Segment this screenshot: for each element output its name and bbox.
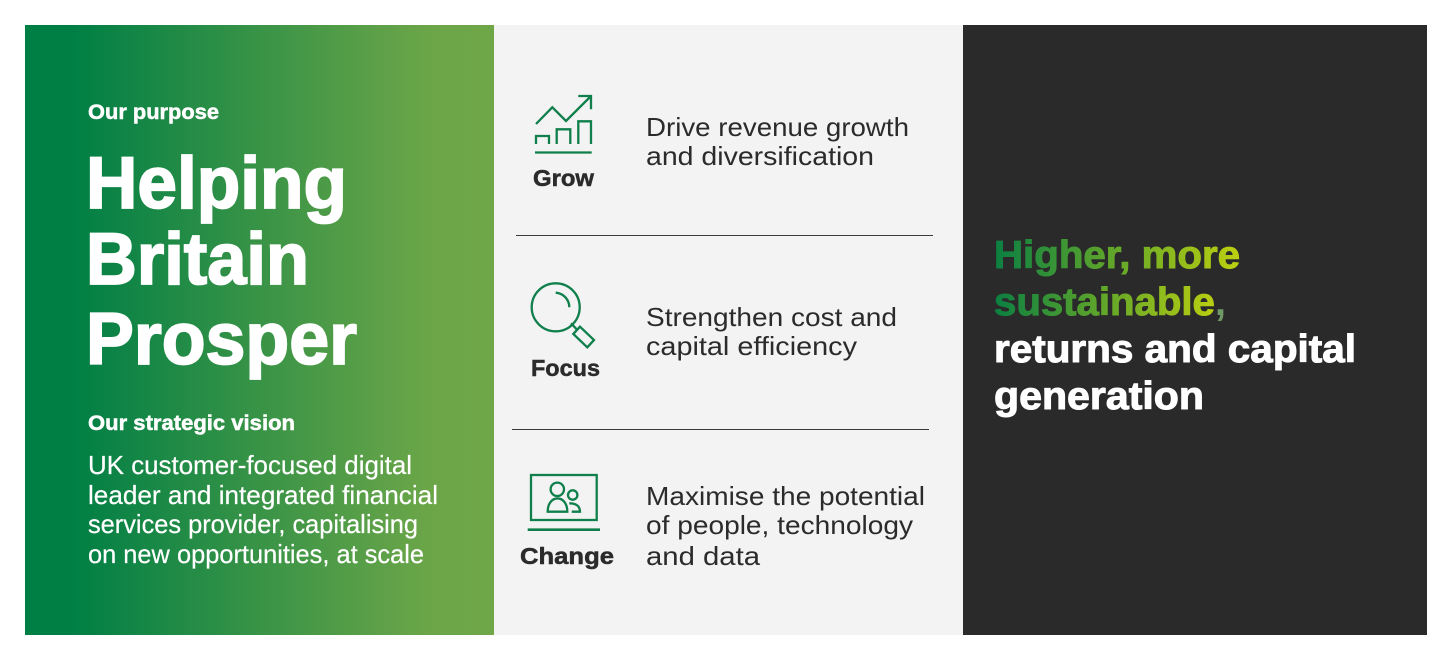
text: outcome statement: sustainable, — [994, 281, 1226, 324]
text: outcome statement: generation — [994, 375, 1204, 418]
text: grow description: and diversification — [646, 141, 874, 171]
text: grow description — [646, 112, 909, 171]
icon: presentation screen with people — [528, 475, 600, 530]
icon: magnifying glass — [532, 283, 594, 347]
text: change description: Maximise the potential — [646, 481, 925, 511]
text: focus description: capital efficiency — [646, 331, 857, 361]
text: outcome statement: Higher, more — [994, 234, 1240, 277]
heading: our purpose: Our purpose — [88, 101, 219, 124]
title: helping britain prosper — [86, 143, 357, 380]
text: change description: of people, technology — [646, 510, 913, 540]
heading: our strategic vision: Our strategic vision — [88, 412, 295, 435]
panel: priorities — [494, 25, 963, 635]
label: change: Change — [520, 543, 614, 569]
label: grow: Grow — [533, 165, 594, 191]
text: focus description: Strengthen cost and — [646, 302, 897, 332]
panel: outcome — [963, 25, 1427, 635]
text: change description — [646, 481, 925, 571]
text: strategic vision description: services provider, capitalising — [88, 509, 418, 539]
text: outcome statement — [994, 234, 1356, 418]
text: strategic vision description: UK customer-focused digital — [88, 450, 412, 480]
title: helping britain prosper: Prosper — [86, 299, 357, 380]
text: focus description — [646, 302, 897, 361]
title: helping britain prosper: Helping — [86, 143, 347, 224]
text: outcome statement: returns and capital — [994, 328, 1356, 371]
text: strategic vision description: leader and integrated financial — [88, 480, 438, 510]
text: grow description: Drive revenue growth — [646, 112, 909, 142]
panel: purpose — [25, 25, 494, 635]
title: helping britain prosper: Britain — [86, 219, 309, 300]
label: focus: Focus — [531, 355, 600, 381]
text: strategic vision description — [88, 450, 438, 569]
text: change description: and data — [646, 541, 761, 571]
icon: growth chart — [535, 96, 592, 152]
text: strategic vision description: on new opportunities, at scale — [88, 539, 424, 569]
